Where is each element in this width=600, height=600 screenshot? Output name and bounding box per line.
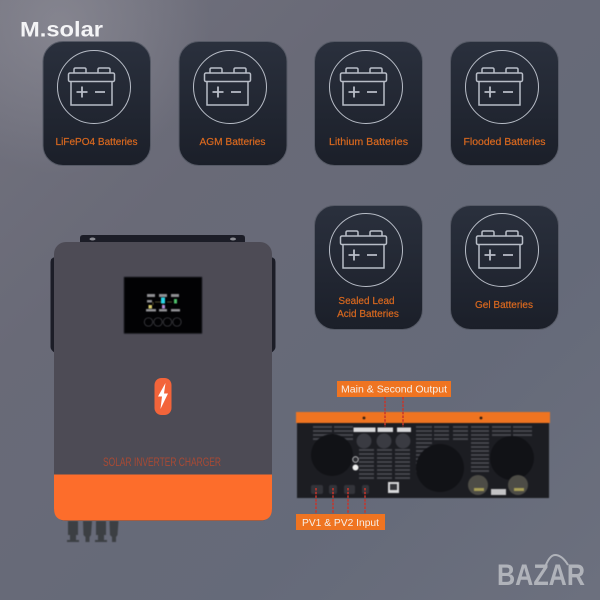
display screen: [124, 277, 202, 334]
body: [54, 242, 272, 521]
RJ45 port: [388, 482, 399, 493]
inverter rear view: [296, 381, 550, 530]
label: PV1 & PV2 Input: PV1 & PV2 Input: [302, 517, 379, 529]
panel: Flooded Batteries: [450, 42, 558, 166]
vent grilles: [313, 427, 532, 478]
label: Lithium Batteries: [329, 137, 408, 148]
icon: battery: [58, 50, 130, 124]
icon: battery: [466, 50, 538, 124]
panel: Sealed Lead Acid Batteries: [314, 206, 422, 330]
label: Acid Batteries: [337, 309, 399, 320]
icon: battery: [466, 214, 538, 286]
orange base: [54, 474, 272, 520]
fans: [311, 434, 534, 492]
chassis: [297, 420, 549, 498]
title: M.solar: M.solar: [20, 18, 104, 42]
panel: AGM Batteries: [179, 42, 287, 166]
lightning badge: [154, 378, 172, 415]
panel: LiFePO4 Batteries: [43, 42, 150, 166]
icon: battery: [330, 214, 402, 286]
terminal blocks: [354, 428, 411, 432]
label: Gel Batteries: [475, 300, 533, 311]
icon: battery: [194, 50, 266, 124]
label: AGM Batteries: [200, 137, 266, 148]
watermark: BAZAR: BAZAR: [497, 559, 585, 592]
panel: Gel Batteries: [450, 206, 558, 330]
label: Sealed Lead: [338, 296, 395, 307]
label: LiFePO4 Batteries: [56, 137, 138, 148]
red leader lines: [316, 397, 403, 514]
panel: Lithium Batteries: [314, 42, 422, 166]
label: Main & Second Output: Main & Second Output: [341, 384, 447, 396]
icon: battery: [330, 50, 402, 124]
side ears: [50, 257, 55, 353]
orange top bar: [296, 412, 550, 423]
label: Main & Second Output: [337, 381, 451, 397]
label: PV1 & PV2 Input: [296, 514, 385, 530]
inverter front view: [50, 235, 276, 542]
product name: SOLAR INVERTER CHARGER: [103, 455, 221, 469]
connectors: [67, 521, 118, 542]
PV connectors: [311, 485, 369, 494]
label: Flooded Batteries: [464, 137, 546, 148]
mounting bracket: [80, 235, 245, 243]
battery terminals: [468, 475, 488, 495]
